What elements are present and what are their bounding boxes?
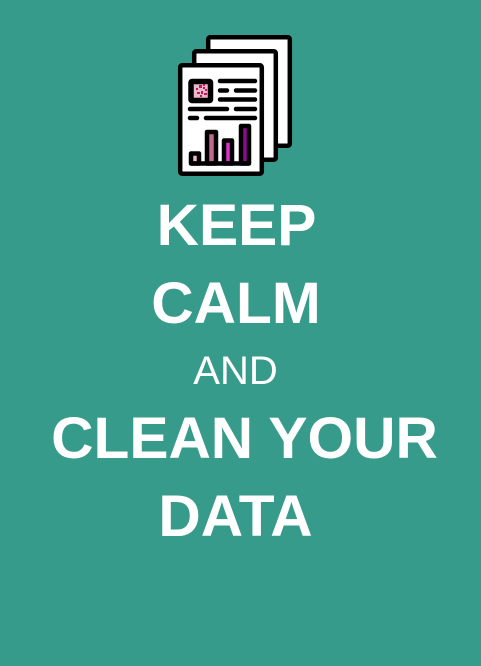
bar chart (191, 126, 249, 164)
heading: CLEAN YOUR: CLEAN YOUR (51, 406, 438, 471)
icon: stacked data report pages (180, 37, 290, 174)
heading: CALM: CALM (151, 271, 321, 336)
icon: back page (208, 37, 290, 146)
icon: front page (180, 65, 262, 174)
icon: middle page (194, 51, 276, 160)
icon: picture thumbnail (191, 82, 210, 100)
heading: KEEP: KEEP (157, 193, 316, 258)
text lines on page (190, 81, 255, 118)
heading: DATA: DATA (158, 484, 313, 549)
text: AND: AND (193, 349, 278, 393)
